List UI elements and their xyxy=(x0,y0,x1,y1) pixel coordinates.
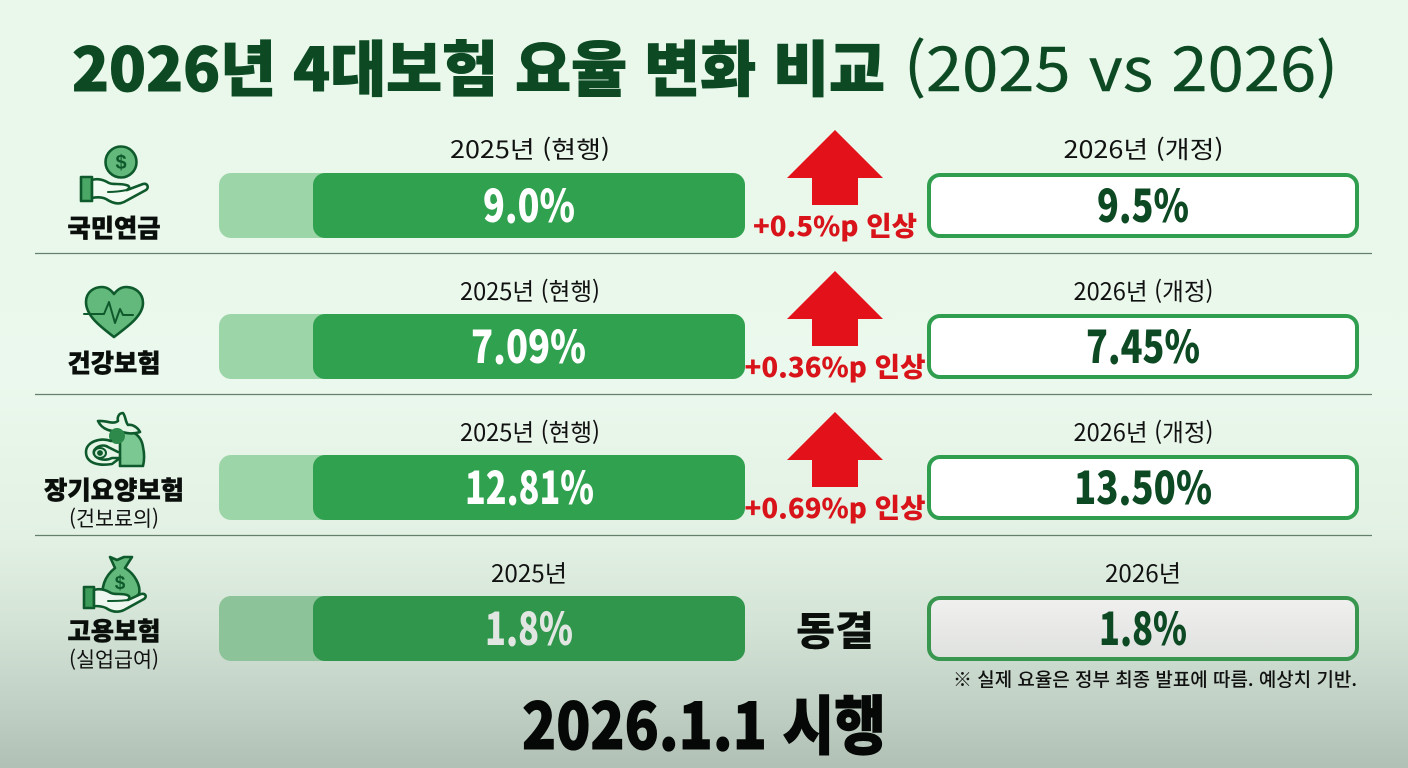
box: 2026 rate 7.45% xyxy=(929,311,1357,377)
box: 2026 rate 1.8% xyxy=(929,593,1357,659)
label: 장기요양보험: 장기요양보험 xyxy=(44,471,184,507)
row: 국민연금 xyxy=(68,130,1357,245)
box: 2026 rate 1.8%: 1.8% xyxy=(1099,593,1187,658)
bar: 2025 rate 7.09% xyxy=(219,311,745,379)
label: 2026년 개정: 2026년 (개정) xyxy=(1064,130,1224,165)
arrow: increase xyxy=(787,412,883,487)
arrow: increase xyxy=(787,130,883,205)
label: 2026년 개정: 2026년 (개정) xyxy=(1074,413,1214,448)
effective date: 2026.1.1 시행 xyxy=(522,676,886,768)
label: 2025년 현행: 2025년 (현행) xyxy=(450,130,610,165)
note: 실업급여: (실업급여) xyxy=(69,644,159,674)
bar: 2025 rate 12.81%: 12.81% xyxy=(465,452,594,517)
label: 건강보험: 건강보험 xyxy=(68,344,160,380)
title: (2025 vs 2026) xyxy=(904,22,1338,109)
change label: +0.36%p 인상: +0.36%p 인상 xyxy=(744,346,926,385)
bar: 2025 rate 1.8%: 1.8% xyxy=(485,593,573,658)
bar: 2025 rate 1.8% xyxy=(219,593,745,661)
status: 동결: 동결 xyxy=(796,599,874,657)
title: 2026년 4대보험 요율 변화 비교 xyxy=(72,22,885,109)
bar: 2025 rate 9.0%: 9.0% xyxy=(483,170,575,235)
icon: hand with coin: $ xyxy=(115,152,127,174)
footnote: ※ 실제 요율은 정부 최종 발표에 따름. 예상치 기반. xyxy=(953,665,1357,692)
label: 2026년: 2026년 xyxy=(1105,554,1181,589)
icon: heart with pulse xyxy=(84,287,143,337)
box: 2026 rate 7.45%: 7.45% xyxy=(1086,311,1200,376)
change label: +0.69%p 인상: +0.69%p 인상 xyxy=(744,487,926,526)
label: 2025년 현행: 2025년 (현행) xyxy=(460,413,600,448)
label: 2025년: 2025년 xyxy=(491,554,567,589)
label: 국민연금: 국민연금 xyxy=(68,209,160,245)
bar: 2025 rate 9.0% xyxy=(219,170,745,238)
box: 2026 rate 9.5%: 9.5% xyxy=(1097,170,1189,235)
box: 2026 rate 13.50% xyxy=(929,452,1357,518)
box: 2026 rate 13.50%: 13.50% xyxy=(1074,452,1212,517)
change label: +0.5%p 인상: +0.5%p 인상 xyxy=(753,205,917,244)
arrow: increase xyxy=(787,271,883,346)
bar: 2025 rate 12.81% xyxy=(219,452,745,520)
label: 2026년 개정: 2026년 (개정) xyxy=(1074,272,1214,307)
row: 장기요양보험 xyxy=(44,412,1357,533)
icon: hand with money bag: $ xyxy=(115,573,126,594)
icon: hand with money bag xyxy=(84,557,146,612)
row: 고용보험 xyxy=(68,554,1357,692)
label: 2025년 현행: 2025년 (현행) xyxy=(460,272,600,307)
title xyxy=(72,22,1338,109)
icon: hand with coin xyxy=(81,146,148,203)
box: 2026 rate 9.5% xyxy=(929,170,1357,236)
row: 건강보험 xyxy=(68,271,1357,385)
bar: 2025 rate 7.09%: 7.09% xyxy=(471,311,586,376)
label: 고용보험: 고용보험 xyxy=(68,612,160,648)
icon: long-term care xyxy=(86,413,144,466)
note: 건보료의: (건보료의) xyxy=(69,503,159,533)
